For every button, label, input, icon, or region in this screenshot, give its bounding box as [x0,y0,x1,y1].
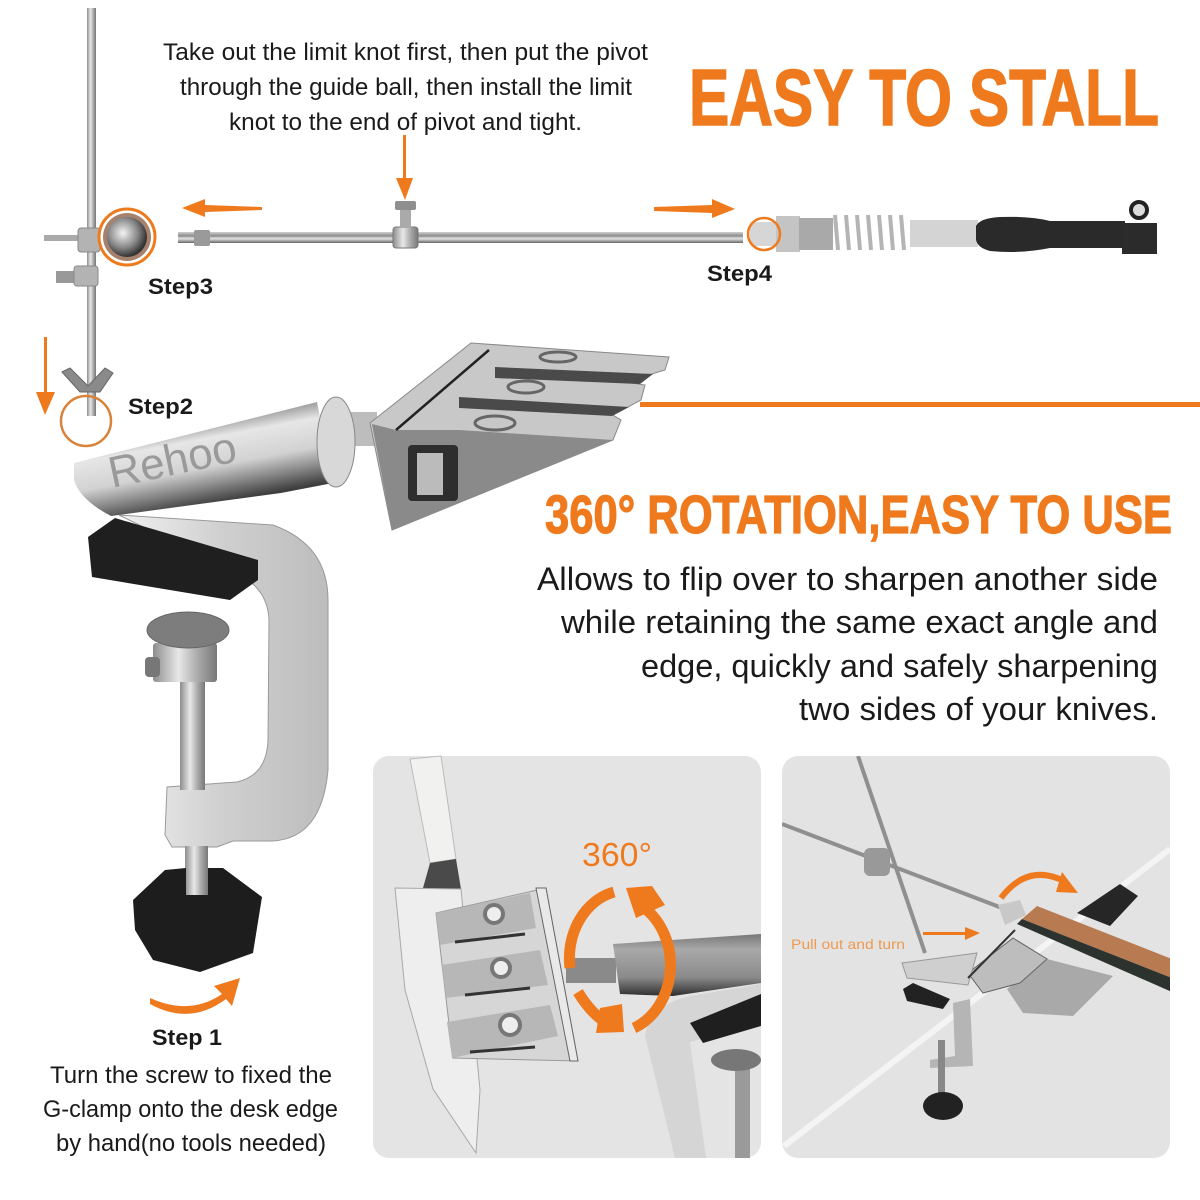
clamp arm [119,515,328,847]
G-clamp sharpener [74,343,669,972]
gray blade [1007,959,1113,1016]
mini screw [938,1040,945,1095]
head lower shade [372,424,613,530]
collar [317,397,355,487]
description text: edge, quickly and safely sharpening [641,648,1158,684]
stem [345,412,377,446]
step 1 instructions: by hand(no tools needed) [56,1130,326,1157]
360 degree label: 360° [582,836,652,873]
rotation arrowheads [596,886,665,1033]
arrow: down to limit knot [396,135,413,200]
head rail [968,930,1015,978]
vertical guide rod [44,8,113,416]
turn arrowhead [1056,872,1078,893]
sharpener head [436,888,578,1061]
guide ball with step 3 label: Step3 [148,274,213,299]
step 2 marker and label [61,394,193,446]
description text [537,561,1158,727]
knife handle [410,756,456,863]
step 1 instructions: G-clamp onto the desk edge [43,1096,338,1123]
clamp screw [735,1068,750,1158]
mini pad [903,983,950,1009]
set screw [145,657,160,677]
screw head [711,1049,761,1071]
brand text: Rehoo [104,423,241,498]
sharpener handle with spring [776,202,1157,254]
head fingers [436,893,558,1058]
panel: pull out and turn photo [782,756,1172,1158]
screw collar [153,643,217,682]
instruction text: pivot installation [163,39,648,136]
step 1 instructions: Step 1 [152,1025,222,1050]
step 4 marker and label: Step4 [707,261,773,286]
arrow: step 1 turn [150,978,240,1014]
lower screw [185,846,208,902]
rod knot [864,848,890,876]
guide bracket [998,900,1026,925]
pivot rod with limit knot [178,201,743,248]
arrow: step 2 down [36,337,55,415]
knife handle [1077,884,1138,926]
clamp arm [645,984,761,1158]
head rivets [475,352,576,430]
sharpener head [370,343,669,530]
head rail [396,350,489,430]
pull out label: Pull out and turn [791,937,905,952]
divider line [640,402,1200,407]
description text: while retaining the same exact angle and [560,604,1158,640]
panel: 360 rotation photo [373,756,761,1158]
black pad [690,994,761,1043]
guide ball with step 3 label [99,209,213,299]
finger rivets [485,905,520,1035]
mini clamp arm [930,999,973,1068]
turn arrow [1001,875,1066,898]
sharpening stone wood [1022,906,1172,978]
head rail [536,888,578,1061]
step 1 instructions: Turn the screw to fixed the [50,1062,332,1089]
guide rod assembly [782,756,1010,953]
knurled screw head [147,612,229,648]
black pad [88,518,258,600]
step 1 instructions [43,1025,338,1157]
instruction text: pivot installation: Take out the limit knot first, then put the pivot [163,39,648,66]
head slots [459,367,653,416]
black knob [133,868,262,972]
rotation arcs [569,892,670,1028]
table edge [784,849,1170,1146]
finger slots [455,934,535,1052]
sharpening stone base [1017,919,1172,992]
head latch [408,445,458,501]
arrow: left to guide ball [182,199,262,217]
knife bolster [423,859,461,889]
pull out arrow [923,927,980,940]
mini knob [923,1092,963,1120]
stem [566,958,616,983]
barrel [74,402,333,516]
step 4 marker and label [707,218,780,286]
head fingers [968,938,1047,993]
step 2 marker and label: Step2 [128,394,193,419]
description text: two sides of your knives. [799,691,1158,727]
barrel [613,934,761,996]
instruction text: pivot installation: through the guide ball, then install the limit [180,74,632,101]
instruction text: pivot installation: knot to the end of pivot and tight. [229,109,582,136]
description text: Allows to flip over to sharpen another side [537,561,1158,597]
mini barrel [902,953,977,985]
clamp screw [180,682,205,790]
arrow: right to handle [654,199,735,218]
knife blade [395,888,480,1153]
